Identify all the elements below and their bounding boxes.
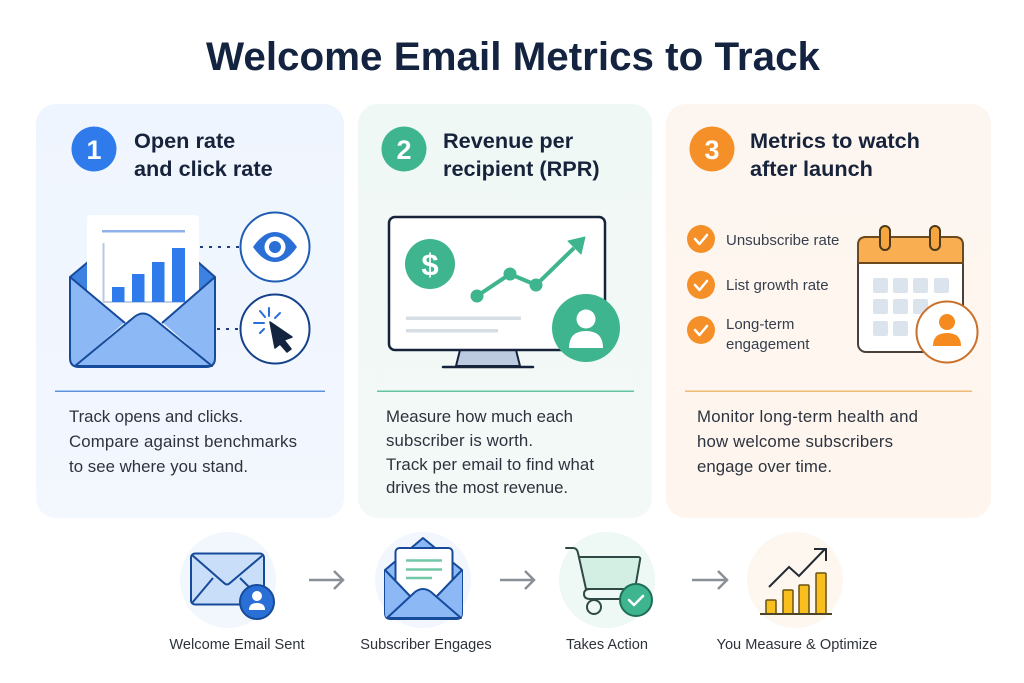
heading: metrics to watch after launch: Metrics to watch xyxy=(750,128,920,153)
label: Subscriber Engages xyxy=(360,637,492,653)
body text: drives the most revenue. xyxy=(386,478,568,497)
connector dots to eye xyxy=(200,246,240,248)
step number 1: 1 xyxy=(86,135,102,165)
heading: revenue per recipient: recipient (RPR) xyxy=(443,156,600,181)
arrow xyxy=(500,571,534,589)
connector dots to cursor xyxy=(217,328,240,330)
heading: open rate and click rate: Open rate xyxy=(134,128,235,153)
flow step: subscriber engages xyxy=(360,532,492,653)
arrow xyxy=(692,571,727,589)
body text: Monitor long-term health and xyxy=(697,407,918,426)
panel: revenue per recipient xyxy=(358,104,652,518)
step number 3 xyxy=(690,126,734,172)
label: You Measure & Optimize xyxy=(717,637,877,653)
label: Takes Action xyxy=(566,637,648,653)
arrow xyxy=(309,571,343,589)
body text: Track per email to find what xyxy=(386,455,594,474)
icon: dollar xyxy=(405,239,455,289)
body text: to see where you stand. xyxy=(69,457,248,476)
checklist: engagement xyxy=(726,336,810,353)
body text xyxy=(386,407,594,497)
body text: engage over time. xyxy=(697,457,832,476)
checklist: List growth rate xyxy=(726,277,829,294)
panel: metrics to watch after launch xyxy=(666,104,991,518)
icon: calendar with user xyxy=(858,226,978,362)
step number 3: 3 xyxy=(704,135,720,165)
flow step: takes action xyxy=(559,532,655,653)
body text: Track opens and clicks. xyxy=(69,407,243,426)
heading: revenue per recipient: Revenue per xyxy=(443,128,574,153)
step number 2: 2 xyxy=(396,135,412,165)
icon: eye xyxy=(240,212,310,282)
label: Welcome Email Sent xyxy=(169,637,305,653)
body text: Measure how much each xyxy=(386,407,573,426)
icon: click cursor xyxy=(240,294,310,364)
step number 1 xyxy=(72,126,116,172)
checklist xyxy=(687,225,839,353)
body text xyxy=(697,407,918,476)
panel: open rate and click rate xyxy=(36,104,344,518)
icon: monitor with revenue chart xyxy=(389,217,605,367)
icon: user badge xyxy=(552,294,620,362)
icon: open envelope with bar chart xyxy=(70,215,215,367)
icon: dollar: $ xyxy=(421,247,439,282)
flow step: you measure and optimize xyxy=(717,532,877,653)
body text: Compare against benchmarks xyxy=(69,432,297,451)
body text: subscriber is worth. xyxy=(386,431,533,450)
heading: metrics to watch after launch: after launch xyxy=(750,156,873,181)
title: Welcome Email Metrics to Track xyxy=(206,35,821,79)
checklist: Unsubscribe rate xyxy=(726,232,839,249)
flow step: welcome email sent xyxy=(169,532,305,653)
heading: open rate and click rate: and click rate xyxy=(134,156,273,181)
body text: how welcome subscribers xyxy=(697,432,893,451)
checklist: Long-term xyxy=(726,316,794,333)
rising trend line xyxy=(470,237,585,302)
step number 2 xyxy=(382,126,426,172)
body text xyxy=(69,407,297,476)
